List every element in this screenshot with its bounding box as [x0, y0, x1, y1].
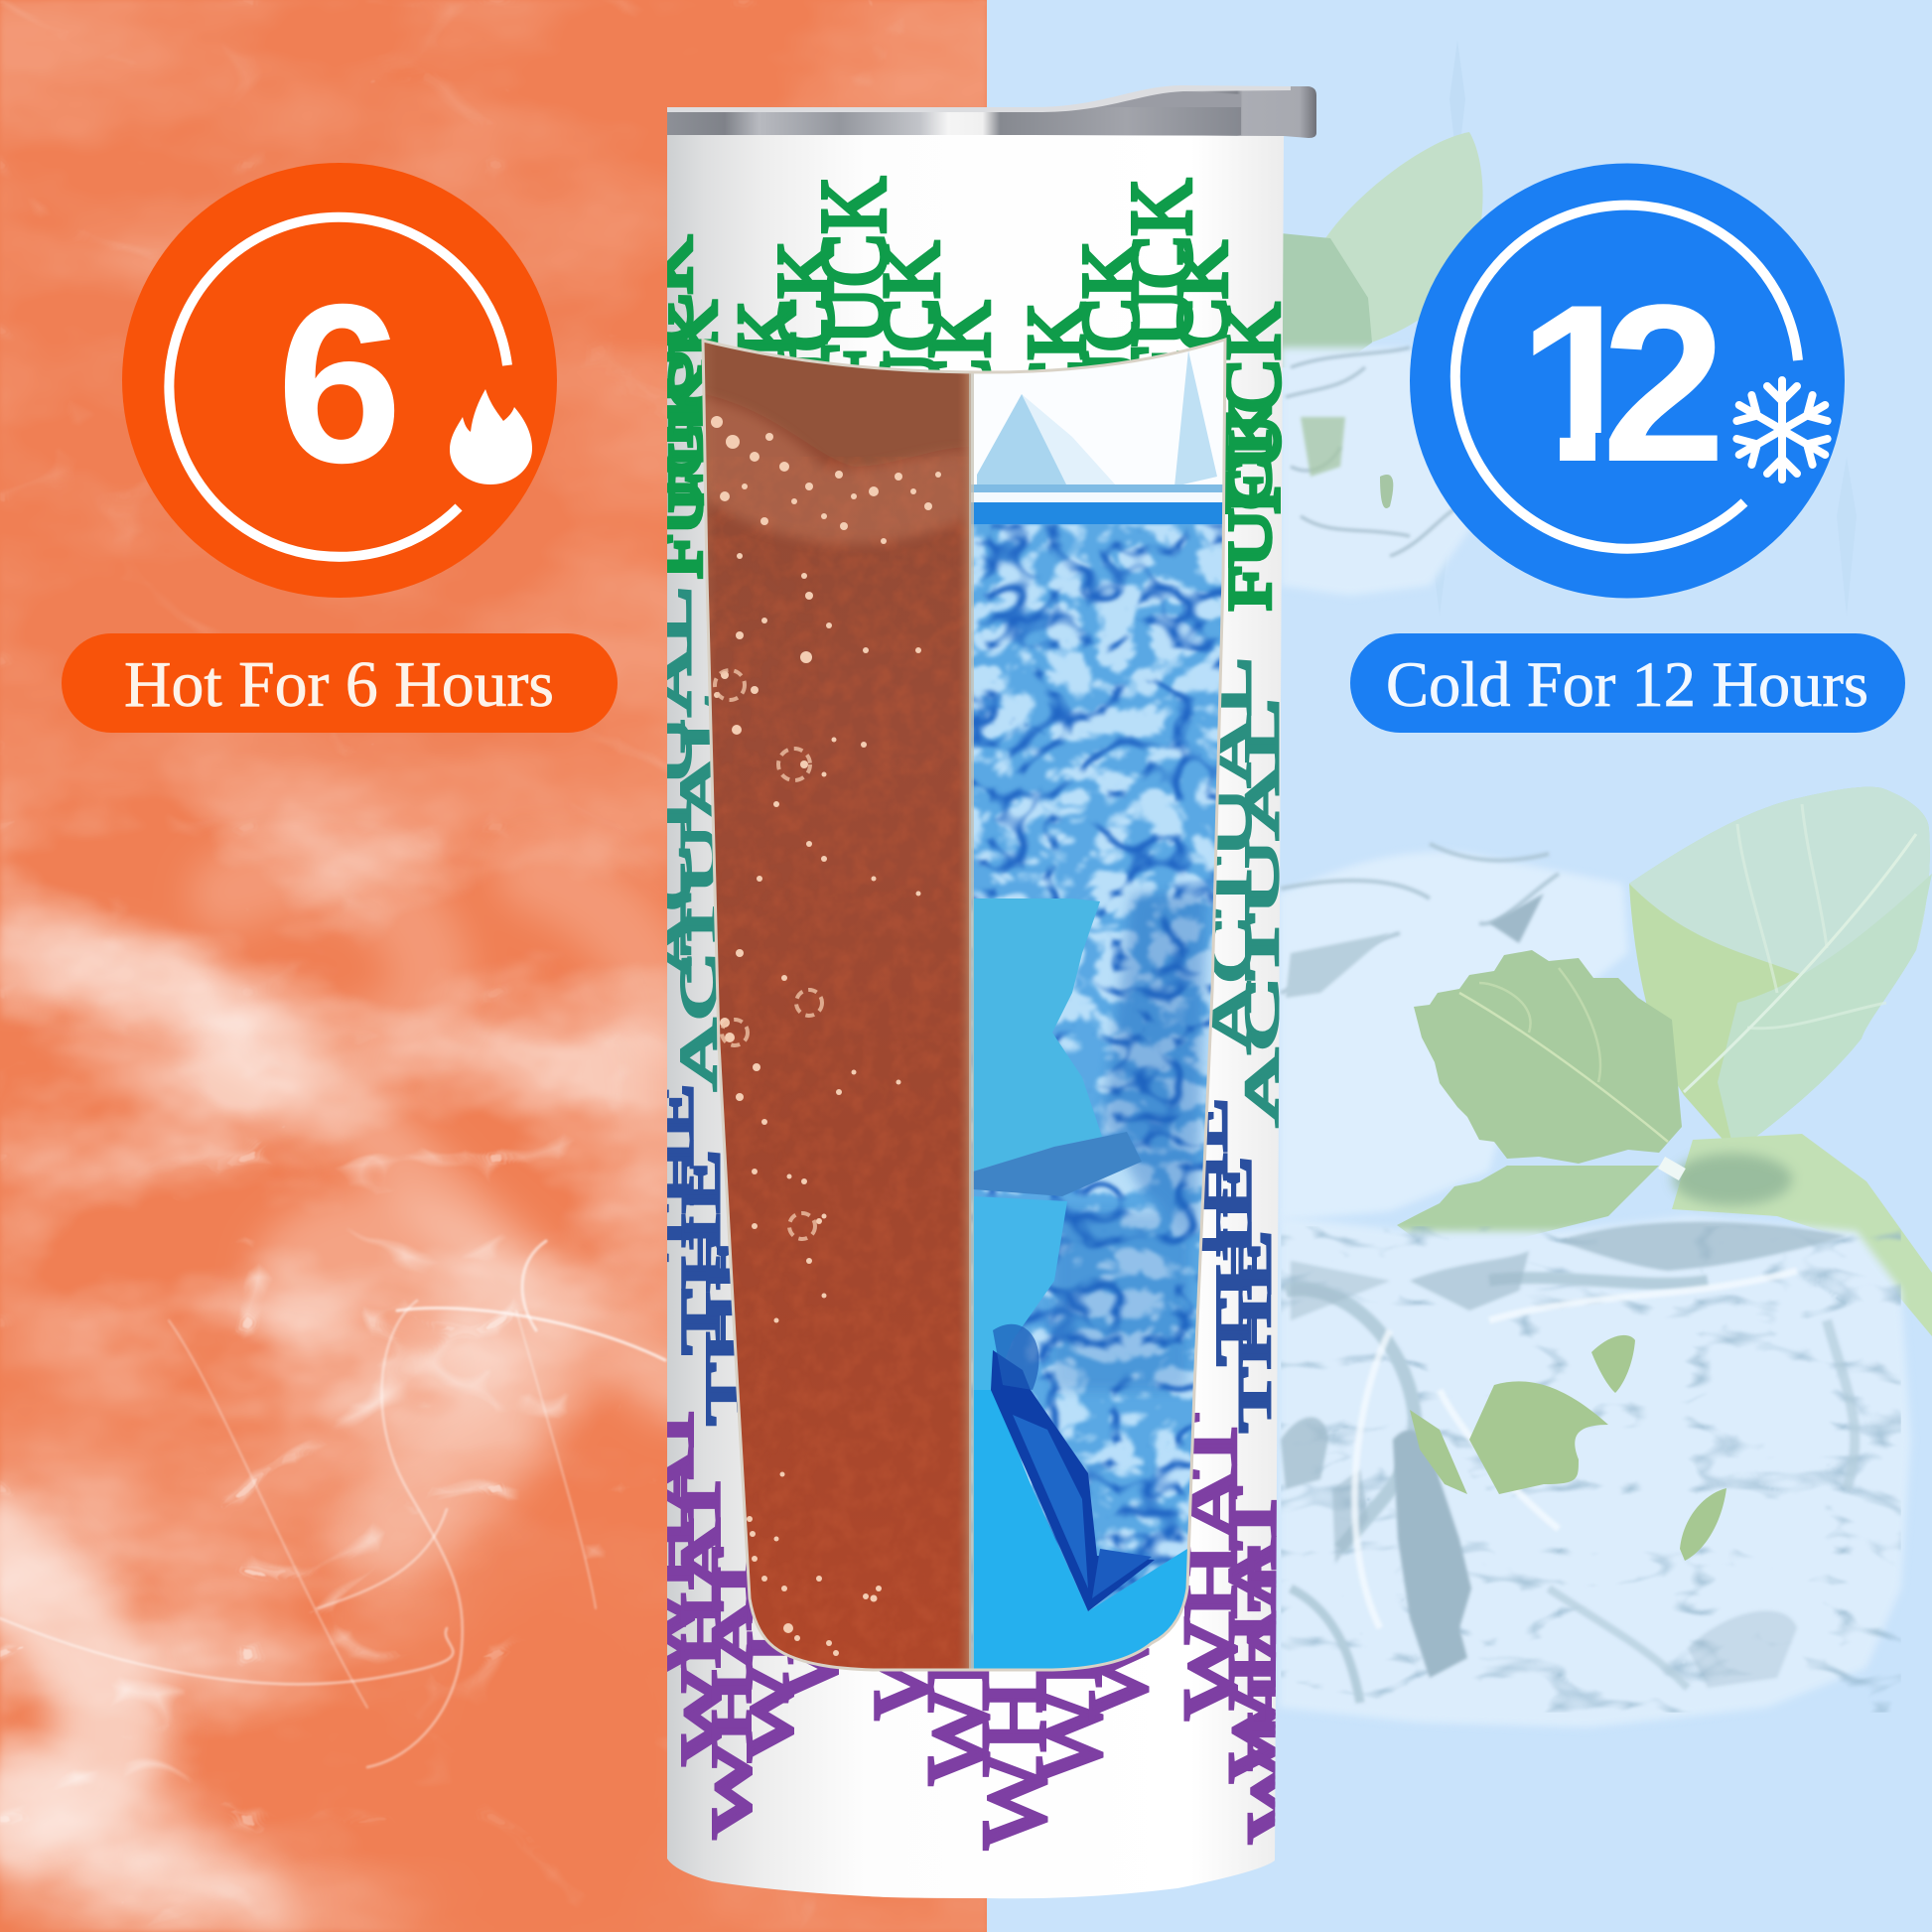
- word columns: THE: THE: [670, 1150, 731, 1354]
- word columns: FUCK: FUCK: [638, 236, 704, 448]
- word columns: FUCK: FUCK: [1011, 303, 1103, 514]
- word columns: WHAT: WHAT: [670, 1469, 731, 1763]
- word columns: FUCK: FUCK: [1163, 241, 1242, 453]
- word columns: FUCK: [638, 177, 1297, 611]
- number: 12, digit 1: 1: [1518, 257, 1643, 508]
- badge: cold 12 hours: [1410, 163, 1845, 598]
- word columns: THE: THE: [647, 1084, 703, 1261]
- word columns: WHAT: WHAT: [1214, 1487, 1290, 1781]
- word columns: FUCK: FUCK: [1114, 179, 1210, 390]
- ring: cold badge arc: [1455, 206, 1798, 549]
- word columns: THE: THE: [1205, 1157, 1261, 1365]
- word columns: WHAT: WHAT: [639, 1400, 705, 1681]
- background: upper ice and mint: [1281, 132, 1483, 596]
- window: hot drink bubbles: [711, 416, 941, 1656]
- word columns: THE: [647, 1084, 1280, 1432]
- word columns: FUCK: FUCK: [648, 367, 714, 579]
- ring: hot badge arc: [169, 217, 507, 557]
- word columns: FUCK: FUCK: [1067, 241, 1155, 453]
- word columns: THE: THE: [1230, 1231, 1280, 1432]
- window: cyan ice facets: [973, 898, 1187, 1678]
- window: iceberg above the waterline: [971, 333, 1231, 524]
- number 12: foot of the 1 trimmed to a plain stem: [1514, 433, 1643, 467]
- badge: hot 6 hours: [122, 163, 557, 598]
- word columns: WHAT: WHAT: [910, 1490, 1007, 1784]
- word columns: FUCK: FUCK: [802, 177, 905, 388]
- word columns: THE: THE: [695, 1231, 751, 1425]
- tumbler body: [667, 134, 1284, 1898]
- word columns: WHAT: WHAT: [766, 1407, 853, 1701]
- word columns: FUCK: FUCK: [1217, 399, 1283, 611]
- word columns: WHAT: WHAT: [701, 1549, 761, 1837]
- word columns: FUCK: FUCK: [762, 241, 850, 453]
- tumbler: [638, 85, 1316, 1898]
- tumbler cut-away window: [695, 333, 1231, 1678]
- word columns: WHAT: WHAT: [963, 1555, 1064, 1849]
- word columns: WHAT: WHAT: [734, 1466, 806, 1760]
- word columns: WHAT: WHAT: [1236, 1548, 1302, 1842]
- word columns: FUCK: FUCK: [1209, 303, 1297, 514]
- number: 6: 6: [277, 258, 402, 510]
- word columns: FUCK: FUCK: [866, 241, 956, 453]
- window: darker ice shading: [1052, 894, 1206, 1390]
- word columns: FUCK: FUCK: [721, 301, 813, 512]
- word columns: FUCK: FUCK: [655, 301, 732, 512]
- window: cold drink half: [971, 333, 1231, 1678]
- background: middle ice: [1279, 844, 1628, 1221]
- word columns: FUCK: FUCK: [910, 301, 1009, 512]
- icon: snowflake: [1731, 380, 1833, 480]
- window: centre divider: [969, 372, 974, 1673]
- panel: cold background: [987, 0, 1932, 1932]
- icon: flame: [450, 389, 532, 484]
- word columns: WHAT: WHAT: [1071, 1425, 1165, 1719]
- word columns: ACTUAL: ACTUAL: [671, 693, 728, 1090]
- number: 12, digit 2: 2: [1601, 257, 1726, 508]
- word columns: WHAT: [639, 1400, 1302, 1849]
- word columns: WHAT: WHAT: [1170, 1414, 1252, 1719]
- tumbler lid: [667, 85, 1316, 138]
- background: faint star glints: [1430, 40, 1857, 1608]
- word columns: WHAT: WHAT: [1016, 1490, 1121, 1784]
- word columns: ACTUAL: ACTUAL: [641, 586, 702, 981]
- background: left mint leaf: [1397, 950, 1682, 1257]
- window: large hot drink bubble rings: [715, 670, 822, 1239]
- tumbler printed words: [638, 177, 1302, 1849]
- background: large mint leaf: [1629, 787, 1932, 1153]
- pill: hot label: [62, 633, 618, 733]
- word columns: ACTUAL: [641, 586, 1289, 1126]
- word columns: ACTUAL: ACTUAL: [1197, 656, 1263, 1053]
- background: large ice cube: [1279, 1216, 1911, 1727]
- word columns: THE: THE: [1173, 1098, 1239, 1272]
- background: lower right mint leaf: [1658, 1134, 1932, 1336]
- background: leaf pieces frozen in ice: [1410, 1335, 1726, 1561]
- word columns: WHAT: WHAT: [857, 1425, 947, 1719]
- pill: hot label: Hot For 6 Hours: [124, 648, 554, 721]
- word columns: ACTUAL: ACTUAL: [1236, 698, 1289, 1126]
- window: hot drink half: [695, 333, 971, 1673]
- pill: cold label: [1350, 633, 1905, 733]
- pill: cold label: Cold For 12 Hours: [1386, 649, 1868, 721]
- panel: hot background: [0, 0, 987, 1932]
